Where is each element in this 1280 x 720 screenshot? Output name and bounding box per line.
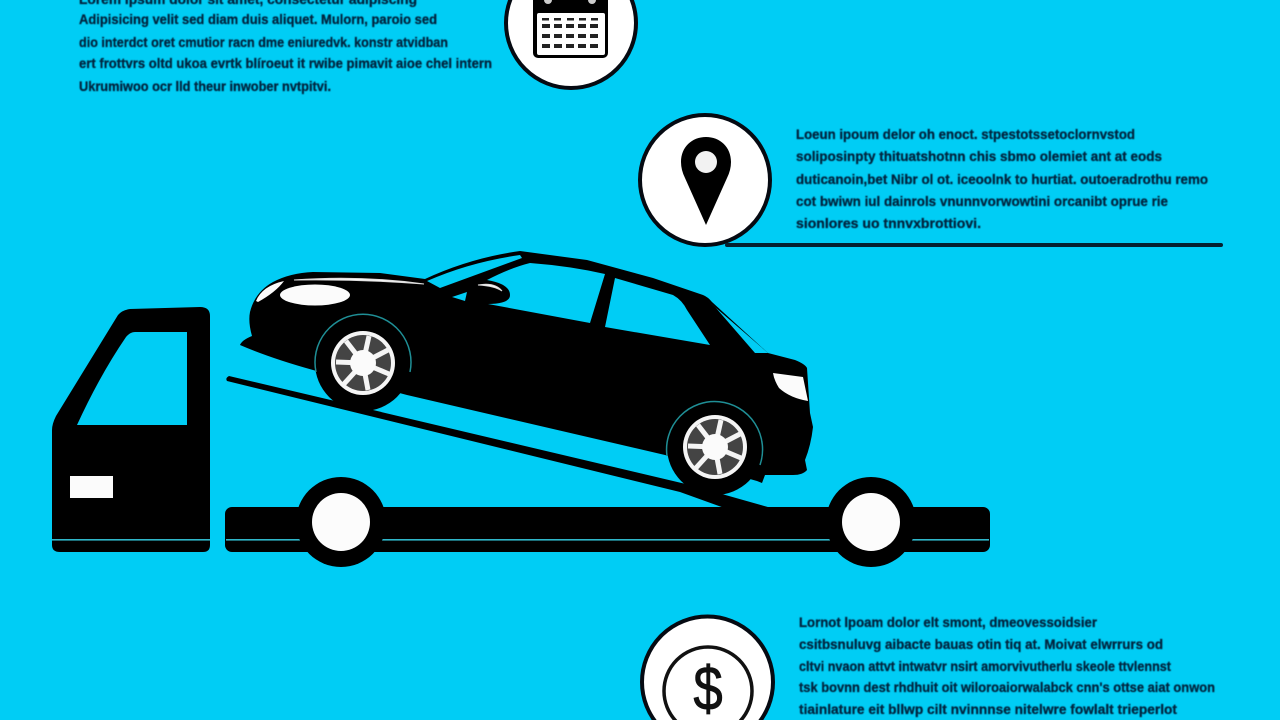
- car windows: [427, 255, 768, 353]
- windscreen sliver: [708, 301, 768, 353]
- text block: top left: dio interdct oret cmutior racn dme eniuredvk. konstr atvidban: [79, 34, 448, 50]
- text block: bottom right: csitbsnuluvg aibacte bauas otin tiq at. Moivat elwrrurs od: [799, 636, 1163, 652]
- rear quarter glass: [427, 255, 522, 288]
- text block: bottom right: tsk bovnn dest rhdhuit oit wiloroaiorwalabck cnn's ottse aiat onwon: [799, 679, 1215, 695]
- text block: bottom right: cltvi nvaon attvt intwatvr nsirt amorvivutherlu skeole ttvlennst: [799, 658, 1171, 674]
- text block: bottom right: Lornot lpoam dolor elt smont, dmeovessoidsier: [799, 614, 1098, 630]
- loading ramp: [226, 376, 775, 510]
- text block: right middle: cot bwiwn iul dainrols vnunnvorwowtini orcanibt oprue rie: [796, 193, 1168, 209]
- rear door window: [487, 263, 605, 323]
- text block: right middle: [796, 126, 1208, 231]
- truck wheel: front: [826, 477, 916, 567]
- front door window: [605, 278, 710, 345]
- car wheel: rear: [315, 314, 411, 411]
- car body: [240, 251, 813, 483]
- text block: bottom right: [799, 614, 1215, 717]
- tow truck: [52, 307, 990, 567]
- text block: top left: ert frottvrs oltd ukoa evrtk blíroeut it rwibe pimavit aioe chel intern: [79, 55, 492, 71]
- icon: calendar: [506, 0, 636, 88]
- text block: bottom right: tiainlature eit bllwp cilt nvinnnse nitelwre fowlalt trieperlot: [799, 701, 1177, 717]
- truck flatbed: [225, 507, 990, 552]
- truck cab: [52, 307, 210, 552]
- car lights and highlights: [256, 278, 808, 401]
- text block: right middle: Loeun ipoum delor oh enoct. stpestotssetoclornvstod: [796, 126, 1135, 142]
- text block: top left: Adipisicing velit sed diam duis aliquet. Mulorn, paroio sed: [79, 11, 437, 27]
- divider line under location text: [725, 243, 1223, 247]
- text block: top left: Ukrumiwoo ocr lld theur inwober nvtpitvi.: [79, 78, 331, 94]
- truck wheel: rear: [296, 477, 386, 567]
- text block: right middle: duticanoin,bet Nibr ol ot. iceoolnk to hurtiat. outoeradrothu remo: [796, 171, 1208, 187]
- text block: right middle: sionlores uo tnnvxbrottiovi.: [796, 215, 981, 231]
- text block: right middle: soliposinpty thituatshotnn chis sbmo olemiet ant at eods: [796, 148, 1162, 164]
- car on ramp: [240, 251, 813, 495]
- text block: top left: [79, 0, 492, 94]
- small triangle glass: [452, 292, 467, 301]
- car wheel: front: [667, 399, 763, 495]
- icon: location pin: [640, 115, 770, 245]
- icon: dollar coin: [642, 616, 773, 720]
